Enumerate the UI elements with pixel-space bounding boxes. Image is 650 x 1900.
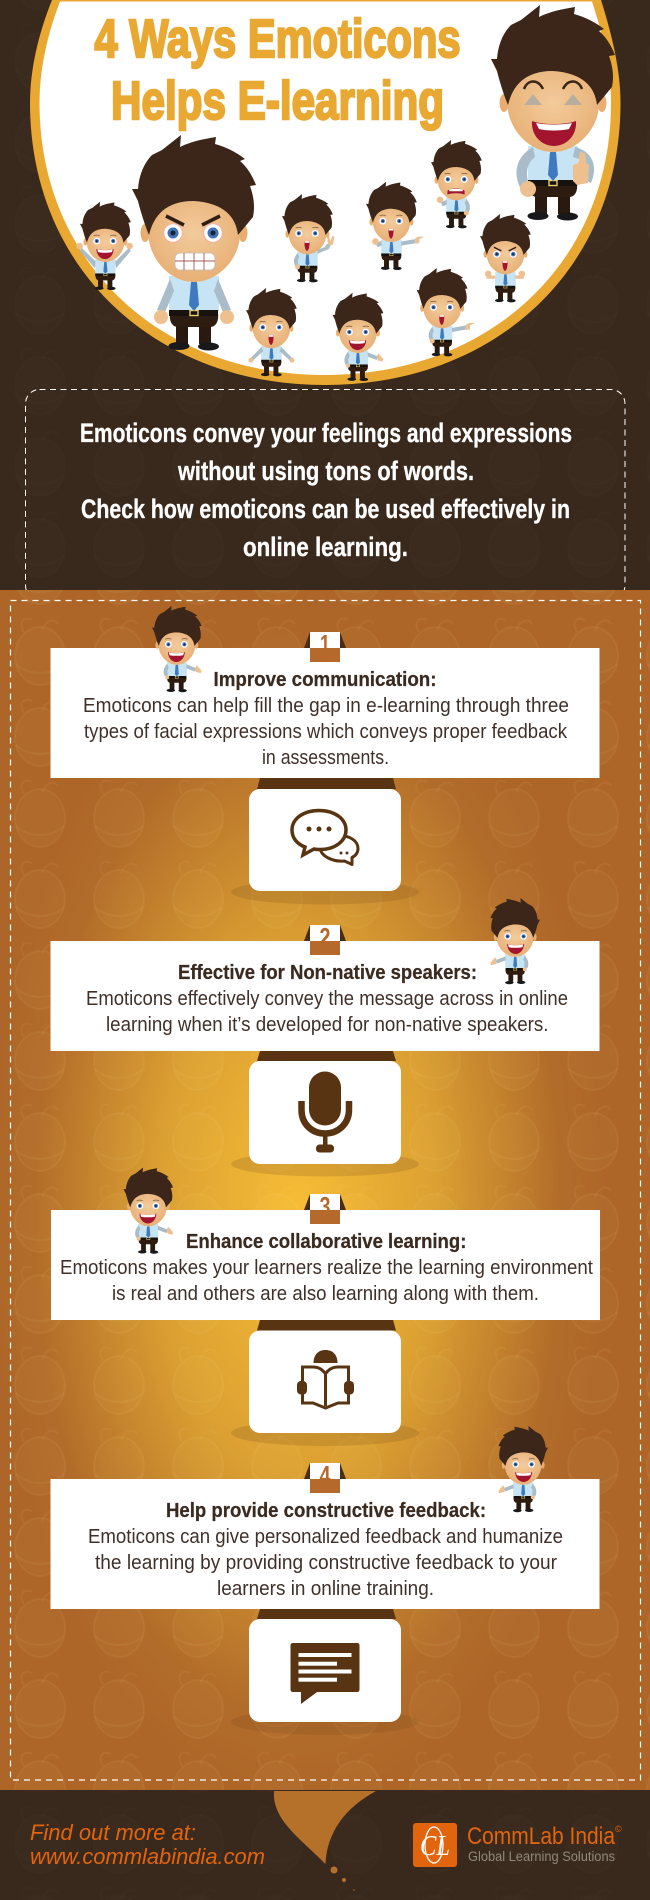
character on card 4 (498, 1426, 548, 1512)
footer link text: Find out more at: (30, 1820, 196, 1845)
card 2: learning when it’s developed for non-native speakers. (106, 1014, 548, 1036)
section 3 (51, 1168, 600, 1446)
card 3: is real and others are also learning along with them. (112, 1283, 539, 1305)
footer link text (30, 1820, 265, 1869)
badge 1 (304, 632, 346, 648)
card 4 (50, 1460, 600, 1609)
card 2: 2 (320, 922, 330, 952)
card 4: 4 (320, 1460, 331, 1490)
character on card 3 (124, 1168, 173, 1254)
character on card 2 (490, 898, 540, 984)
card 1: Improve communication: (214, 668, 436, 691)
card 1: Emoticons can help fill the gap in e-learning through three (83, 695, 569, 717)
icon tile: reader with book (231, 1320, 419, 1446)
section 2 (50, 898, 600, 1176)
badge 2 (304, 925, 346, 941)
card 2: Emoticons effectively convey the message across in online (86, 988, 568, 1010)
card 1 (50, 629, 600, 778)
CommLab India logo: © (615, 1824, 622, 1834)
badge 3 (304, 1194, 346, 1210)
card 1: types of facial expressions which conveys proper feedback (84, 721, 568, 743)
icon tile: chat bubbles (231, 778, 419, 904)
title (94, 9, 460, 131)
CommLab India logo: CL (420, 1830, 450, 1862)
intro dashed panel (26, 390, 625, 600)
footer (0, 1790, 650, 1900)
character: laughing wave (332, 293, 383, 381)
character: scared (431, 140, 482, 228)
character: pointing (366, 182, 424, 270)
icon tile: message (231, 1609, 419, 1735)
footer link text: www.commlabindia.com (30, 1844, 265, 1869)
CommLab India logo: Global Learning Solutions (468, 1849, 615, 1864)
CommLab India logo: CommLab India (467, 1823, 616, 1850)
intro text: without using tons of words. (177, 456, 474, 486)
intro text (80, 418, 572, 562)
card 2 (50, 922, 600, 1051)
card 1: in assessments. (262, 747, 389, 769)
title: 4 Ways Emoticons (94, 9, 460, 69)
character: big angry (132, 135, 256, 350)
card 4: the learning by providing constructive feedback to your (95, 1552, 557, 1574)
section 1 (50, 606, 600, 904)
card 3: Emoticons makes your learners realize the learning environment (60, 1257, 593, 1279)
card 2: Effective for Non-native speakers: (178, 961, 477, 984)
character: small angry (480, 214, 531, 302)
title: Helps E-learning (111, 71, 444, 131)
footer drop shape (274, 1791, 376, 1891)
character: pointing lower (417, 268, 475, 356)
character: peace sign (282, 194, 334, 282)
character on card 1 (152, 606, 202, 692)
section 4 (50, 1426, 600, 1735)
card 3 (51, 1191, 600, 1320)
character: arms up (76, 202, 133, 290)
card 4: learners in online training. (217, 1578, 434, 1600)
intro text: online learning. (243, 532, 408, 562)
character: big happy thumbs up (491, 5, 615, 220)
badge 4 (304, 1463, 346, 1479)
card 4: Emoticons can give personalized feedback and humanize (88, 1526, 563, 1548)
card 1: 1 (320, 629, 330, 659)
orange main panel (0, 590, 650, 1790)
CommLab India logo (413, 1823, 622, 1867)
icon tile: microphone (231, 1051, 419, 1176)
character: surprised (246, 288, 297, 376)
card 3: 3 (320, 1191, 330, 1221)
card 4: Help provide constructive feedback: (166, 1499, 486, 1522)
header circle panel (30, 0, 620, 385)
card 3: Enhance collaborative learning: (186, 1230, 466, 1253)
